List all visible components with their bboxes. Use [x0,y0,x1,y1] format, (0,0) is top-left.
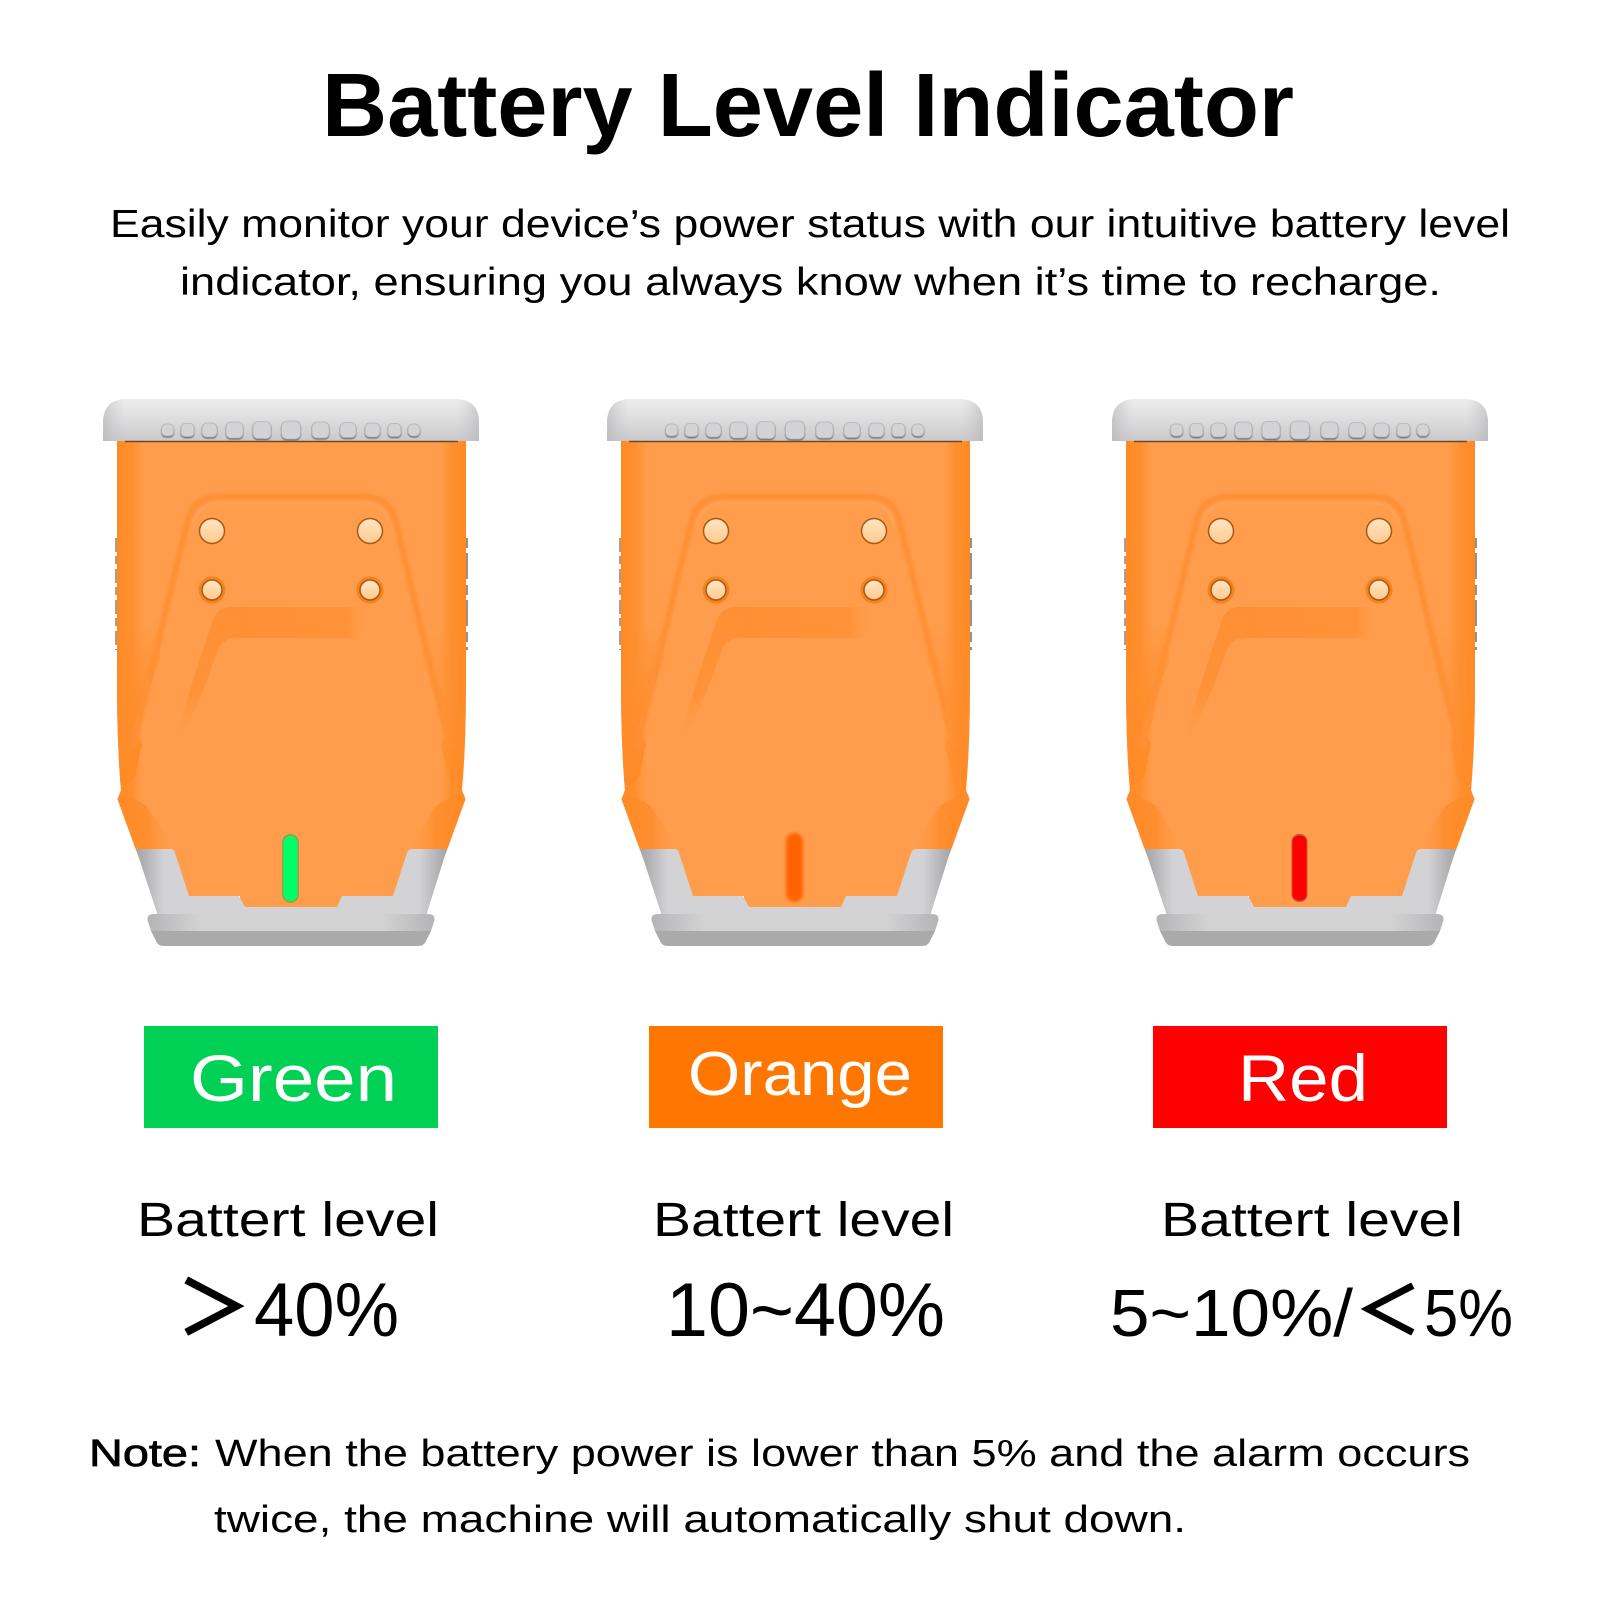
device recessed panel [172,607,372,752]
label: green [144,1026,438,1128]
value: 10 to 40 percent: 10~40% [666,1268,945,1353]
device side ticks [620,538,971,650]
value: 5 to 10 percent, under 5 percent [1110,1256,1513,1355]
device orange body [621,441,970,909]
device orange body [1126,441,1475,909]
subtitle text block: Easily monitor your device’s power status with our intuitive battery level [110,203,1510,246]
device foot [1156,914,1444,946]
value: greater than 40 percent [176,1247,399,1357]
device grey lower trim [136,849,447,916]
device top cap [103,399,479,442]
device vent buttons [162,421,420,439]
device raised ridge [133,497,450,748]
indicator light: orange [786,833,803,902]
value: greater than 40 percent: 40% [254,1268,399,1353]
label: red [1153,1026,1447,1128]
panel: green device [103,399,479,946]
device raised ridge [1142,497,1459,748]
device side ticks [116,538,467,650]
label: orange [649,1026,943,1128]
device screws [702,518,888,604]
indicator light: red [1292,834,1308,902]
text: red battery level caption: Battert level [1161,1194,1463,1247]
panel: orange device [607,399,983,946]
note text block: When the battery power is lower than 5% and the alarm occurs [215,1433,1470,1475]
device grey lower trim [640,849,951,916]
label: red: Red [1238,1041,1368,1115]
device foot [651,914,939,946]
title: Battery Level Indicator [322,56,1294,156]
panel: red device [1112,399,1488,946]
text: green battery level caption: Battert level [137,1194,439,1247]
device top cap [1112,399,1488,442]
device vent buttons [1171,421,1429,439]
device top cap [607,399,983,442]
device foot [147,914,435,946]
label: orange: Orange [688,1040,912,1109]
note text block [89,1433,1470,1541]
device screws [1208,518,1392,604]
value: 5 to 10 percent, under 5 percent: 5~10%/ [1110,1276,1353,1351]
value: 5 to 10 percent, under 5 percent: 5% [1424,1276,1513,1351]
text: orange battery level caption: Battert level [653,1194,954,1247]
device recessed panel [676,607,876,752]
device raised ridge [637,497,954,748]
value: 5 to 10 percent, under 5 percent: ＜ [1354,1256,1422,1355]
device screws [198,518,384,604]
label: green: Green [190,1041,397,1115]
subtitle text block [110,203,1510,304]
value: greater than 40 percent: ＞ [176,1247,252,1357]
device grey lower trim [1145,849,1456,916]
note text block: Note: [89,1433,201,1475]
subtitle text block: indicator, ensuring you always know when it’s time to recharge. [180,261,1441,304]
device orange body [117,441,466,909]
note text block: twice, the machine will automatically shut down. [214,1499,1186,1541]
device recessed panel [1181,607,1381,752]
device side ticks [1125,538,1476,650]
indicator light: green [282,834,299,903]
device vent buttons [666,421,924,439]
